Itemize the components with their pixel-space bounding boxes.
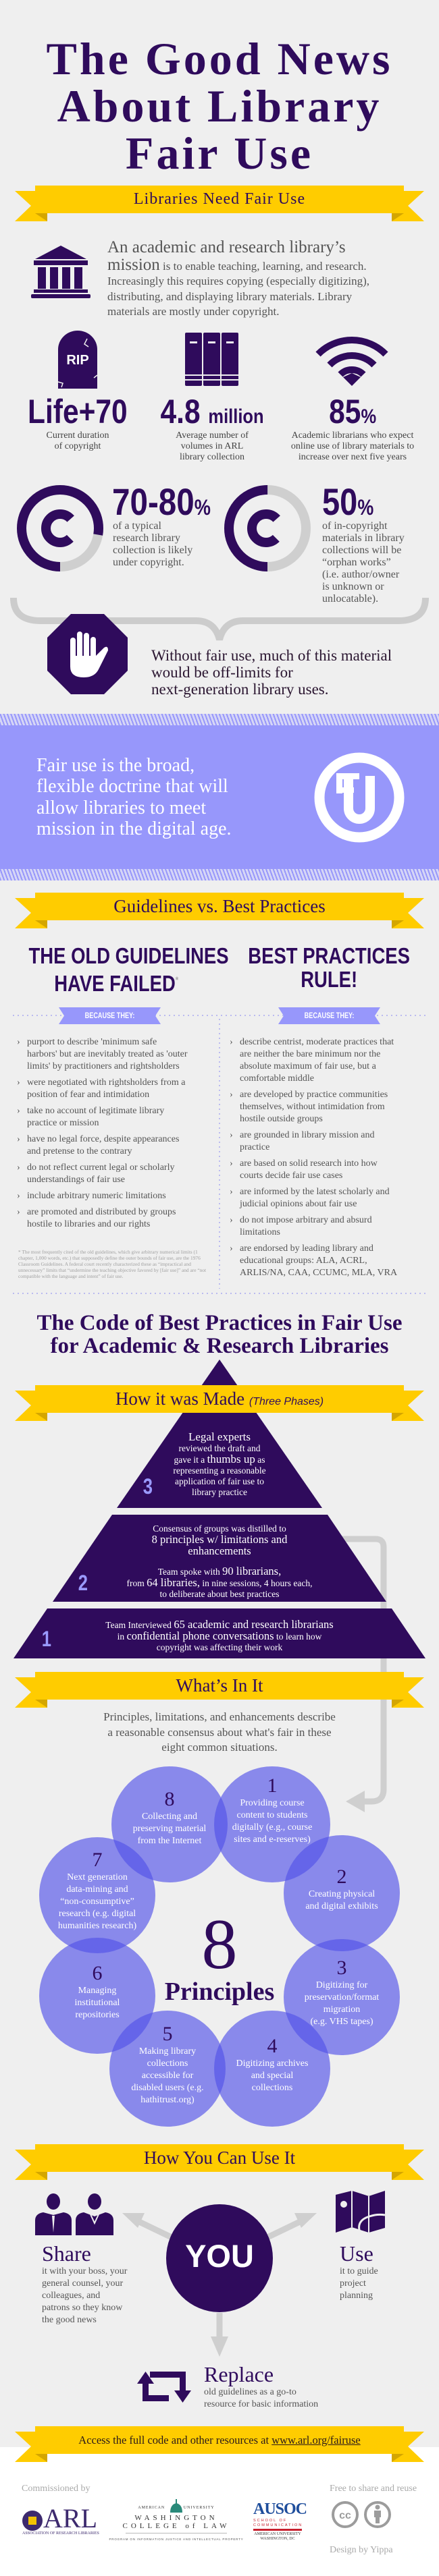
principle 6: Managing [78, 1986, 116, 1996]
logo: School of Communication: COMMUNICATION [253, 2523, 303, 2527]
list: best practices reasons: describe centrist, moderate practices that [240, 1037, 394, 1047]
list: old guidelines reasons: position of fear and intimidation [27, 1090, 149, 1100]
principle 5: accessible for [142, 2071, 193, 2081]
callout: without fair use [151, 647, 392, 698]
text: fair use doctrine: Fair use is the broad, [36, 755, 195, 776]
copyright stat 2: is unknown or [322, 581, 384, 592]
stat: life+70: Current duration [47, 430, 109, 441]
phase 2 text: Team spoke with 90 librarians, [158, 1565, 281, 1577]
tab: because they left: BECAUSE THEY: [85, 1011, 134, 1020]
list: best practices reasons: ARLIS/NA, CAA, CCUMC, MLA, VRA [240, 1268, 397, 1278]
icon: fair use logo [315, 753, 404, 842]
heading: code of best practices: The Code of Best Practices in Fair Use [36, 1311, 403, 1335]
number 2: 2 [78, 1571, 88, 1595]
principle 3: migration [324, 2005, 360, 2015]
icon: tombstone: RIP [66, 353, 89, 368]
ribbon: What's In It [0, 1672, 439, 1710]
ribbon: How it was Made [0, 1385, 439, 1423]
text: use: Use [340, 2241, 373, 2266]
ribbon: Guidelines vs Best Practices [15, 893, 424, 928]
heading: old guidelines failed: THE OLD GUIDELINES [28, 944, 229, 969]
principle 5 [100, 2023, 235, 2106]
intro text: principles: a reasonable consensus about what's fair in these [107, 1726, 332, 1739]
footer: design credit: Design by Yippa [330, 2545, 393, 2555]
mission text block: mission is to enable teaching, learning, and research. [107, 256, 367, 274]
principle 7 [30, 1849, 165, 1932]
phase 1 text: in confidential phone conversations to learn how [118, 1629, 321, 1642]
text: fair use doctrine: allow libraries to meet [36, 797, 206, 818]
copyright stat 1: research library [113, 532, 180, 544]
icon: creative commons: cc [339, 2510, 351, 2521]
principle 8: preserving material [133, 1824, 206, 1834]
phase 3 text [173, 1430, 266, 1497]
list: old guidelines reasons: and pretense to the contrary [27, 1146, 132, 1156]
stat: 4.8 million: library collection [180, 452, 244, 462]
list: best practices reasons [230, 1037, 397, 1278]
copyright stat 1: of a typical [113, 520, 161, 532]
principle 1: sites and e-reserves) [234, 1835, 311, 1845]
principle 5: collections [147, 2059, 188, 2069]
number: Life+70 [28, 393, 128, 430]
principle 5: Making library [139, 2046, 196, 2056]
title [47, 33, 392, 179]
principle 1 [205, 1774, 340, 1846]
copyright stat 2: (i.e. author/owner [322, 569, 399, 580]
footnote: * The most frequently cited of the old guidelines, which give arbitrary numerical limits (1 chapter, 1,000 words, etc.) that supposedly define the outer bounds of fair use, are the 1976 Classroom Guidelines. A federal court recently characterized these as “impractical and unnecessary” limits that “undermine the teaching objective favored by [fair use]” and are “not compatible with the language and intent” of fair use. [18, 1249, 206, 1279]
list: best practices reasons: hostile outside groups [240, 1114, 323, 1124]
list: best practices reasons: are informed by the latest scholarly and [240, 1187, 390, 1197]
number: 4.8 million [160, 393, 264, 430]
logo: ARL: ASSOCIATION OF RESEARCH LIBRARIES [22, 2531, 99, 2536]
chart: three-phase pyramid [14, 1360, 425, 1658]
title: The Good News [47, 33, 392, 84]
heading: best practices rule: BEST PRACTICES [249, 944, 410, 969]
list: best practices reasons: comfortable middle [240, 1073, 314, 1084]
logo: School of Communication: SCHOOL OF [253, 2519, 287, 2523]
phase 3 text: reviewed the draft and [178, 1443, 261, 1453]
phase 3 text: gave it a thumbs up as [174, 1453, 265, 1465]
icon: tombstone [58, 331, 97, 389]
principle 8: from the Internet [138, 1836, 201, 1846]
principle 3: 3 [336, 1957, 347, 1979]
heading: best practices rule [249, 944, 410, 992]
text: share [42, 2241, 127, 2326]
phase 3 text: library practice [192, 1487, 247, 1497]
principle 7: 7 [92, 1849, 103, 1871]
logo: Washington College of Law: WASHINGTON [134, 2514, 218, 2522]
big 8 principles: 8 [201, 1905, 238, 1984]
stat: 4.8 million: volumes in ARL [181, 441, 243, 451]
text: fair use doctrine [36, 755, 232, 839]
callout: without fair use: Without fair use, much of this material [151, 647, 392, 664]
copyright stat 1: 70-80% [112, 480, 211, 523]
copyright stat 2: 50% [322, 480, 373, 523]
principle 1: content to students [236, 1810, 308, 1820]
list: best practices reasons: themselves, without intimidation from [240, 1102, 385, 1112]
number: 85% [329, 393, 376, 430]
list: old guidelines reasons: have no legal force, despite appearances [27, 1134, 179, 1144]
chart: eight principles circles [0, 1761, 439, 2132]
copyright stat 1 [17, 480, 211, 571]
ribbon: Libraries Need Fair Use [15, 186, 424, 221]
list: old guidelines reasons: hostile to libraries and our rights [27, 1219, 150, 1229]
principle 2: Creating physical [309, 1889, 375, 1899]
principle 5: hathitrust.org) [140, 2095, 195, 2105]
logo: Washington College of Law: AMERICAN UNIVERSITY [138, 2506, 215, 2510]
phase 2 text: to deliberate about best practices [160, 1589, 279, 1599]
big 8 principles [152, 1911, 287, 2005]
stat: 85%: increase over next five years [299, 452, 407, 462]
mission text block: Increasingly this requires copying (especially digitizing), [107, 275, 369, 287]
ribbon: How You Can Use It: How You Can Use It [144, 2148, 295, 2168]
principle 3: Digitizing for [316, 1980, 367, 1990]
list: old guidelines reasons: purport to describe 'minimum safe [27, 1037, 157, 1047]
icon: books [185, 333, 238, 386]
principle 6: institutional [75, 1998, 120, 2008]
mission text block: distributing, and displaying library materials. Library [107, 290, 352, 303]
heading: old guidelines failed [28, 944, 229, 997]
phase 1 text: copyright was affecting their work [157, 1642, 282, 1652]
list: old guidelines reasons: are promoted and distributed by groups [27, 1207, 176, 1217]
icon: you circle [166, 2204, 273, 2312]
tab: because they right [278, 1007, 380, 1024]
stat: life+70 [28, 331, 128, 451]
text: share: patrons so they know [42, 2303, 122, 2313]
logo: ARL: ARL [43, 2503, 97, 2533]
principle 2: and digital exhibits [305, 1901, 378, 1911]
stat: 85%: Academic librarians who expect [292, 430, 413, 441]
list: best practices reasons: do not impose arbitrary and absurd [240, 1215, 372, 1225]
list: best practices reasons: are neither the bare minimum nor the [240, 1049, 380, 1059]
list: best practices reasons: limitations [240, 1227, 280, 1237]
principle 6: repositories [75, 2010, 120, 2020]
principle 8: Collecting and [142, 1812, 197, 1822]
icon: copyright ring 70-80 [17, 485, 103, 571]
principle 2 [274, 1866, 409, 1913]
principle 4: and special [251, 2071, 293, 2081]
footer white background [0, 2447, 439, 2576]
ribbon: Guidelines vs Best Practices: Guidelines vs. Best Practices [113, 896, 326, 916]
heading: code of best practices: for Academic & Research Libraries [50, 1334, 389, 1358]
list: best practices reasons: absolute maximum of fair use, but a [240, 1061, 376, 1071]
brace connector [10, 598, 429, 641]
ribbon: How it was Made: How it was Made (Three Phases) [115, 1389, 324, 1409]
callout: without fair use: next-generation library uses. [151, 681, 328, 698]
principle 6 [30, 1962, 165, 2021]
list: old guidelines reasons [18, 1037, 188, 1229]
tab: because they left [59, 1007, 161, 1024]
list: old guidelines reasons: practice or mission [27, 1118, 99, 1128]
stat: 85%: online use of library materials to [291, 441, 414, 451]
text: fair use doctrine: mission in the digital age. [36, 818, 232, 839]
ribbon: access the full code: Access the full code and other resources at www.arl.org/fairuse [78, 2434, 361, 2446]
principle 6: 6 [92, 1962, 103, 1984]
logo: Washington College of Law: PROGRAM ON INFORMATION JUSTICE AND INTELLECTUAL PROPERTY [109, 2538, 243, 2541]
list: old guidelines reasons: understandings of fair use [27, 1175, 125, 1185]
heading: old guidelines failed: HAVE FAILED* [54, 972, 178, 997]
ribbon: How You Can Use It [0, 2144, 439, 2182]
logo: ARL [22, 2507, 103, 2537]
icon: map [336, 2191, 386, 2233]
principle 3: preservation/format [305, 1992, 379, 2003]
principle 7: “non-consumptive” [60, 1897, 134, 1907]
logo: School of Communication: AMERICAN UNIVERSITY [254, 2532, 301, 2536]
copyright stat 2: “orphan works” [322, 557, 391, 568]
logo: Washington College of Law [107, 2499, 246, 2544]
phase 2 text [127, 1523, 312, 1599]
phase 3 text: application of fair use to [175, 1476, 264, 1486]
icon: stop hand [47, 614, 128, 694]
logo: School of Communication [253, 2500, 302, 2542]
mission text block: An academic and research library’s [107, 238, 346, 256]
ribbon: Libraries Need Fair Use: Libraries Need Fair Use [134, 190, 305, 208]
arrows: from YOU [101, 2200, 338, 2361]
text: share: colleagues, and [42, 2291, 100, 2301]
phase 2 text: enhancements [188, 1544, 251, 1557]
principle 8: 8 [165, 1788, 174, 1810]
copyright stat 2: of in-copyright [322, 520, 387, 532]
list: best practices reasons: are based on solid research into how [240, 1158, 378, 1169]
mission text block: materials are mostly under copyright. [107, 305, 279, 318]
principle 3 [274, 1957, 409, 2028]
dotted separators [13, 1015, 425, 1294]
phase 3 text: Legal experts [188, 1430, 251, 1443]
icon: library building [31, 246, 91, 298]
icon: copyright ring 50 [224, 485, 311, 571]
stat: 4.8 million [160, 333, 264, 462]
title: Fair Use [126, 128, 313, 179]
footer: commissioned by: Commissioned by [22, 2484, 91, 2494]
principle 4: collections [252, 2083, 292, 2093]
icon: people [34, 2193, 115, 2235]
text: use: it to guide [340, 2266, 378, 2276]
text: use [340, 2241, 378, 2302]
principle 7: data-mining and [66, 1884, 128, 1895]
copyright stat 1: collection is likely [113, 544, 192, 556]
ribbon: What's In It: What’s In It [176, 1675, 263, 1696]
logo: School of Communication: WASHINGTON, DC [260, 2537, 295, 2541]
panel: fair use doctrine band [0, 714, 439, 880]
list: best practices reasons: are grounded in library mission and [240, 1130, 374, 1140]
phase 2 text: Consensus of groups was distilled to [153, 1523, 286, 1534]
text: share: it with your boss, your [42, 2266, 127, 2276]
principle 5: disabled users (e.g. [131, 2083, 204, 2093]
principle 7: Next generation [67, 1872, 128, 1882]
principle 4: Digitizing archives [236, 2059, 308, 2069]
list: old guidelines reasons: do not reflect current legal or scholarly [27, 1163, 174, 1173]
logo: Washington College of Law: COLLEGE of LAW [123, 2522, 230, 2530]
principle 7: humanities research) [58, 1921, 136, 1931]
text: replace [204, 2362, 318, 2411]
list: old guidelines reasons: harbors' but are inevitably treated as 'outer [27, 1049, 188, 1059]
text: replace: old guidelines as a go-to [204, 2387, 296, 2397]
number 3: 3 [143, 1474, 153, 1499]
copyright stat 2: collections will be [322, 544, 401, 556]
title: About Library [57, 80, 382, 132]
list: best practices reasons: educational groups: ALA, ACRL, [240, 1256, 367, 1266]
text: share: the good news [42, 2315, 97, 2325]
list: best practices reasons: practice [240, 1142, 269, 1152]
copyright stat 2: materials in library [322, 532, 405, 544]
text: replace: Replace [204, 2362, 274, 2386]
phase 2 text: 8 principles w/ limitations and [152, 1533, 287, 1546]
list: old guidelines reasons: take no account of legitimate library [27, 1106, 164, 1116]
copyright stat 2 [224, 480, 405, 605]
list: old guidelines reasons: limits' by practitioners and rightsholders [27, 1061, 180, 1071]
tab: because they right: BECAUSE THEY: [305, 1011, 354, 1020]
logo: School of Communication: AUSOC [253, 2500, 307, 2518]
principle 5: 5 [162, 2023, 173, 2045]
phase 2 text: from 64 libraries, in nine sessions, 4 hours each, [127, 1576, 312, 1589]
text: share: general counsel, your [42, 2278, 123, 2289]
principle 4: 4 [267, 2035, 277, 2057]
arrow: pyramid to principles [342, 1536, 386, 1812]
big 8 principles: Principles [165, 1978, 274, 2006]
callout: without fair use: would be off-limits for [151, 664, 293, 681]
ribbon: access the full code [0, 2426, 439, 2464]
list: best practices reasons: are developed by practice communities [240, 1090, 388, 1100]
stat: 85% [291, 337, 414, 462]
list: old guidelines reasons: include arbitrary numeric limitations [27, 1191, 166, 1201]
text: replace: resource for basic information [204, 2399, 318, 2409]
list: best practices reasons: are endorsed by leading library and [240, 1243, 373, 1254]
intro text: principles: Principles, limitations, and enhancements describe [103, 1710, 336, 1723]
stat: life+70: of copyright [55, 441, 101, 451]
icon: replace [137, 2371, 191, 2403]
principle 8 [102, 1788, 237, 1847]
principle 2: 2 [336, 1866, 347, 1888]
phase 1 text [105, 1618, 334, 1652]
principle 1: digitally (e.g., course [232, 1822, 312, 1832]
list: best practices reasons: courts decide fair use cases [240, 1171, 342, 1181]
text: share: Share [42, 2241, 91, 2266]
list: old guidelines reasons: were negotiated with rightsholders from a [27, 1077, 185, 1088]
icon: wifi [316, 337, 388, 386]
copyright stat 1: under copyright. [113, 557, 184, 568]
footer: free to share: Free to share and reuse [330, 2484, 417, 2494]
mission text block [107, 238, 369, 318]
text: fair use doctrine: flexible doctrine that will [36, 776, 228, 797]
phase 1 text: Team Interviewed 65 academic and research librarians [105, 1618, 334, 1631]
intro text: principles: eight common situations. [161, 1741, 278, 1754]
list: best practices reasons: judicial opinions about fair use [240, 1199, 357, 1209]
intro text: principles [0, 1710, 439, 1756]
heading: code of best practices [36, 1311, 403, 1358]
copyright stat 2: unlocatable). [322, 593, 378, 605]
phase 3 text: representing a reasonable [173, 1465, 266, 1476]
heading: best practices rule: RULE! [301, 968, 357, 992]
number 1: 1 [42, 1627, 51, 1651]
icon: creative commons [332, 2500, 392, 2530]
principle 3: (e.g. VHS tapes) [310, 2017, 373, 2027]
principle 4 [205, 2035, 340, 2094]
icon: you circle: YOU [185, 2238, 254, 2274]
stat: 4.8 million: Average number of [176, 430, 249, 441]
text: use: project [340, 2278, 366, 2289]
principle 1: 1 [267, 1774, 277, 1797]
text: use: planning [340, 2291, 373, 2301]
principle 1: Providing course [240, 1798, 305, 1808]
principle 7: research (e.g. digital [59, 1909, 136, 1919]
